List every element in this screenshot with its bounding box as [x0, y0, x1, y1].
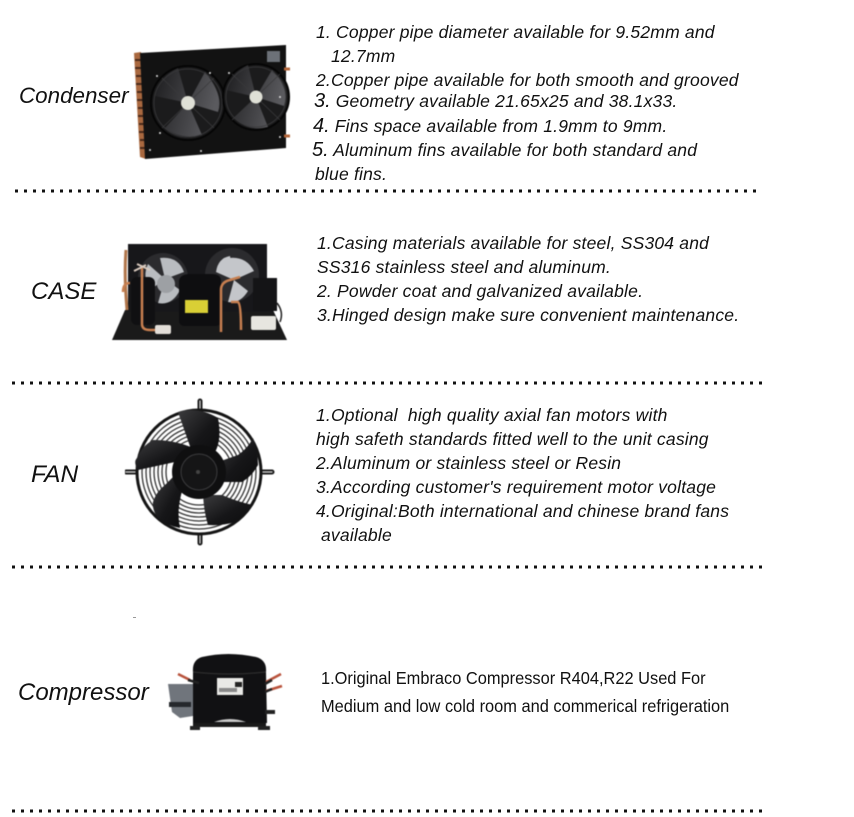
specification list: case: 1.Casing materials available for steel, SS304 and: [317, 233, 709, 253]
specification list: case: 3.Hinged design make sure convenient maintenance.: [317, 305, 739, 325]
specification list: condenser: 12.7mm: [331, 46, 395, 66]
heading: Condenser: Condenser: [19, 83, 129, 108]
specification list: case: 2. Powder coat and galvanized available.: [317, 281, 643, 301]
specification list: condenser: 1. Copper pipe diameter available for 9.52mm and: [316, 22, 715, 42]
specification list: condenser: 2.Copper pipe available for both smooth and grooved: [316, 70, 739, 90]
specification list: fan: 2.Aluminum or stainless steel or Resin: [316, 453, 621, 473]
specification list: condenser: 3. Geometry available 21.65x25 and 38.1x33.: [314, 90, 677, 112]
heading: CASE: CASE: [31, 278, 96, 305]
icon: condenser unit with two fans: [133, 44, 291, 160]
specification list: fan: 1.Optional high quality axial fan motors with: [316, 405, 668, 425]
specification list: condenser: blue fins.: [315, 164, 387, 184]
icon: compressor: [167, 653, 283, 731]
specification list: compressor: 1.Original Embraco Compressor R404,R22 Used For: [321, 668, 706, 688]
heading: Compressor: Compressor: [18, 679, 149, 706]
specification list: fan: available: [321, 525, 392, 545]
icon: condensing unit on base plate: [112, 243, 288, 341]
heading: FAN: FAN: [31, 461, 78, 488]
specification list: compressor: Medium and low cold room and commerical refrigeration: [321, 696, 729, 716]
icon: axial fan with guard: [124, 398, 276, 546]
specification list: condenser: 5. Aluminum fins available for both standard and: [312, 139, 697, 161]
specification list: condenser: 4. Fins space available from 1.9mm to 9mm.: [313, 115, 667, 137]
specification list: case: SS316 stainless steel and aluminum.: [317, 257, 611, 277]
specification list: fan: 3.According customer's requirement motor voltage: [316, 477, 716, 497]
specification list: fan: high safeth standards fitted well to the unit casing: [316, 429, 709, 449]
specification list: fan: 4.Original:Both international and chinese brand fans: [316, 501, 729, 521]
